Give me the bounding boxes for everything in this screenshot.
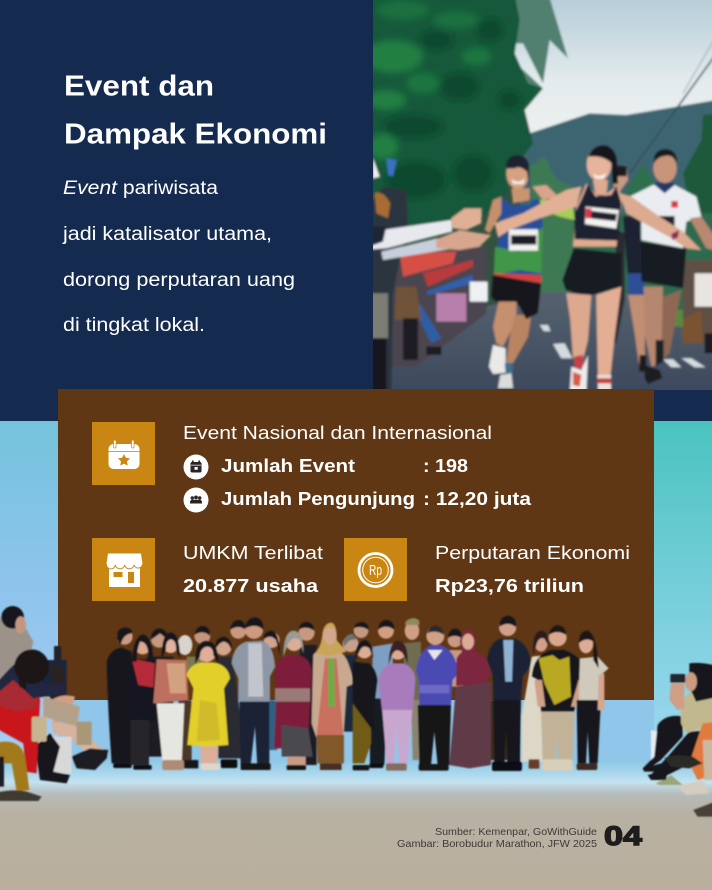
photo: fashion show group, left half xyxy=(0,606,359,801)
woman cream dress xyxy=(522,655,546,762)
stat: jumlah event: Jumlah Event xyxy=(221,456,355,476)
background: left stage wall xyxy=(0,421,60,766)
stat value: 12,20 juta: : 12,20 juta xyxy=(423,489,532,509)
runner left: blue and green singlet xyxy=(493,300,516,347)
footer: sources: Gambar: Borobudur Marathon, JFW 2025 xyxy=(397,839,597,850)
title xyxy=(64,70,327,150)
icon: rupiah coin: Rp xyxy=(369,562,382,579)
man batik shirt xyxy=(239,700,270,765)
back runner, blue xyxy=(623,215,645,293)
stat: rp23,76 triliun: Rp23,76 triliun xyxy=(435,576,584,596)
back row xyxy=(151,631,168,648)
heading: event nasional dan internasional: Event Nasional dan Internasional xyxy=(183,423,492,443)
footer: sources: Sumber: Kemenpar, GoWithGuide xyxy=(435,827,597,838)
icon: small calendar badge xyxy=(184,454,208,480)
photo: marathon runners xyxy=(360,0,712,403)
left crowd xyxy=(360,247,486,367)
woman behind yellow dress xyxy=(217,657,245,758)
background: lower stage wall centre xyxy=(58,698,654,768)
brown panel background xyxy=(58,389,654,700)
icon: calendar with star xyxy=(92,422,155,485)
woman grey top xyxy=(577,700,601,763)
footer: sources xyxy=(397,827,597,850)
woman red-black top xyxy=(128,658,155,722)
woman purple xyxy=(382,707,413,763)
text block: intro description: Event pariwisata xyxy=(63,178,218,199)
icon: shop xyxy=(92,538,155,601)
icon: rupiah coin xyxy=(344,538,407,601)
man blue batik xyxy=(418,705,451,765)
text block: intro description: di tingkat lokal. xyxy=(63,315,205,336)
woman floral top, white trousers xyxy=(153,659,188,703)
back row xyxy=(354,623,368,638)
woman maroon hijab xyxy=(449,682,491,768)
title: Event dan xyxy=(64,70,214,102)
stat value: 198: : 198 xyxy=(423,456,468,476)
audience left xyxy=(0,606,33,687)
man in navy suit xyxy=(493,698,521,765)
woman yellow dress xyxy=(187,662,230,747)
stat: jumlah pengunjung: Jumlah Pengunjung xyxy=(221,489,415,509)
right crowd xyxy=(683,260,712,343)
palm fronds xyxy=(503,0,568,93)
woman beige hijab xyxy=(312,647,355,738)
heading: perputaran ekonomi: Perputaran Ekonomi xyxy=(435,543,630,563)
heading: umkm terlibat: UMKM Terlibat xyxy=(183,543,323,563)
panel: statistics xyxy=(58,389,654,700)
photo: fashion show group, right half xyxy=(353,616,712,817)
text block: intro description: dorong perputaran uang xyxy=(63,270,295,291)
runner right: white jersey xyxy=(655,290,681,363)
background: right stage wall xyxy=(654,421,712,766)
background: stage floor xyxy=(0,760,712,890)
woman maroon batik xyxy=(274,655,312,748)
audience right xyxy=(651,730,658,763)
background: navy panel xyxy=(0,0,373,421)
title: Dampak Ekonomi xyxy=(64,118,327,150)
stat: 20.877 usaha: 20.877 usaha xyxy=(183,576,319,596)
road xyxy=(360,292,712,403)
woman black with batik skirt xyxy=(353,662,378,730)
man black and yellow shirt xyxy=(541,712,575,760)
page number: 04 xyxy=(604,821,642,851)
runner centre: black crop top xyxy=(614,165,628,192)
woman in black xyxy=(107,647,134,763)
text block: intro description xyxy=(62,178,295,336)
text block: intro description: jadi katalisator utama, xyxy=(62,224,272,245)
icon: visitors badge xyxy=(184,488,208,512)
